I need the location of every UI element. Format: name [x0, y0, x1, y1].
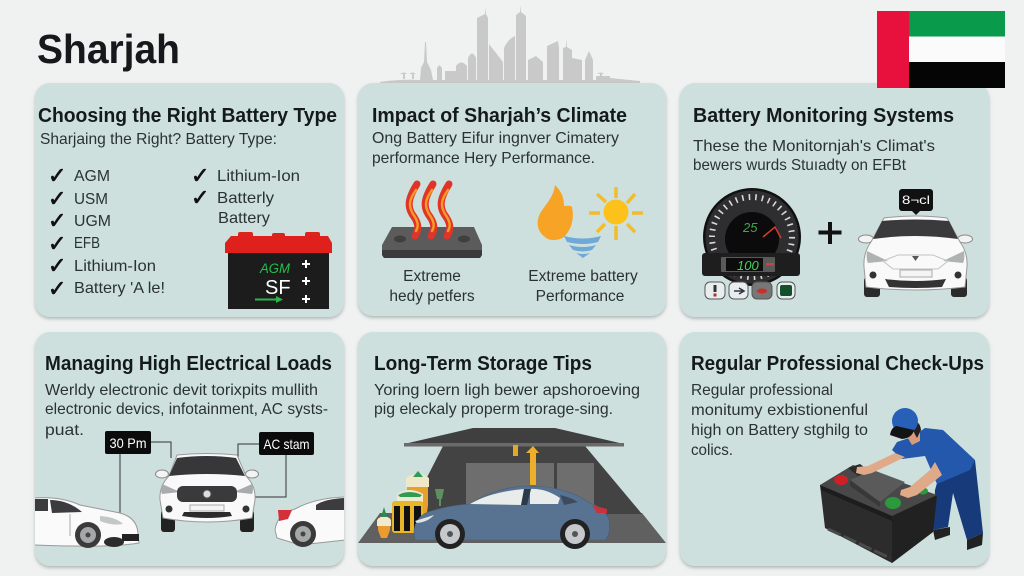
- checklist left: [48, 164, 165, 302]
- body text: These the Monitornjah's Climat's: [693, 138, 935, 155]
- checklist left: AGM: [74, 168, 110, 185]
- body text: monitumy exbistionenful: [691, 402, 868, 419]
- heading: Impact of Sharjah’s Climate: [372, 105, 627, 127]
- icon: AGM battery: SF: [265, 277, 291, 299]
- icon: dashboard gauge: 25: [742, 220, 758, 235]
- body text: [45, 382, 328, 439]
- UAE flag: [877, 11, 1005, 88]
- body text: [372, 130, 619, 167]
- panel: choosing the right battery type: [35, 83, 344, 317]
- body text: electronic devics, infotainment, AC systs-: [45, 401, 328, 418]
- body text: performance Hery Performance.: [372, 150, 595, 167]
- callout lines: [120, 442, 286, 514]
- icon: mechanic arms: [856, 453, 942, 498]
- skyline illustration: [380, 5, 640, 83]
- heading: Managing High Electrical Loads: [45, 353, 332, 375]
- checklist left: EFB: [74, 235, 100, 252]
- heading: Choosing the Right Battery Type: [38, 105, 337, 127]
- body text: [374, 382, 640, 418]
- checklist right: Battery: [218, 210, 270, 227]
- icon: AGM battery: [225, 232, 332, 309]
- icon: yellow arrow: [526, 446, 539, 485]
- title: Sharjah: [37, 26, 180, 72]
- panel: battery monitoring systems: [680, 83, 989, 317]
- checklist left: ✓: [48, 187, 66, 212]
- heading: Battery Monitoring Systems: [693, 105, 954, 127]
- body text: colics.: [691, 442, 733, 459]
- icon: speech bubble label: 8¬cl: [902, 193, 930, 207]
- checklist left: ✓: [48, 254, 66, 279]
- checklist right: Lithium-Ion: [217, 168, 300, 185]
- panel: long-term storage tips: [358, 332, 666, 566]
- icon: plus: [818, 222, 842, 244]
- body text: Werldy electronic devit torixpits mullith: [45, 382, 318, 399]
- caption: left: [389, 268, 475, 305]
- caption: left: Extreme: [403, 268, 461, 285]
- icon: flame, water and sun: [538, 185, 643, 258]
- icon: car battery: [820, 464, 937, 563]
- checklist right: ✓: [191, 186, 209, 211]
- heading: Regular Professional Check-Ups: [691, 353, 984, 375]
- panel: regular professional check-ups: [680, 332, 989, 566]
- storage containers: [377, 471, 444, 538]
- body text: bewers wurds Stuıadty on EFBt: [693, 157, 907, 174]
- icon: white car left: [34, 498, 139, 548]
- icon: white car right: [275, 497, 345, 547]
- icon: dashboard gauge: [702, 188, 801, 299]
- checklist right: Batterly: [217, 190, 274, 207]
- icon: white car front: [858, 216, 972, 297]
- caption: right: [528, 268, 638, 305]
- checklist left: Battery 'A le!: [74, 280, 165, 297]
- body text: Regular professional: [691, 382, 833, 399]
- icon: AGM battery: AGM: [259, 261, 291, 276]
- subtitle: Sharjaing the Right? Battery Type:: [40, 131, 277, 148]
- callout: AC stam: [259, 432, 314, 455]
- heading: Long-Term Storage Tips: [374, 353, 592, 375]
- checklist left: ✓: [48, 232, 66, 257]
- icon: blue sedan: [414, 486, 610, 549]
- icon: speech bubble label: [899, 189, 933, 215]
- checklist left: Lithium-Ion: [74, 258, 156, 275]
- panel: impact of climate: [358, 83, 666, 316]
- callout: AC stam: AC stam: [264, 436, 310, 452]
- checklist left: USM: [74, 191, 108, 208]
- caption: left: hedy petfers: [389, 288, 475, 305]
- icon: mechanic body: [890, 408, 983, 550]
- caption: right: Performance: [536, 288, 624, 305]
- panel: managing high electrical loads: [34, 332, 345, 566]
- body text: pig eleckaly properm trorage-sing.: [374, 401, 613, 418]
- icon: dashboard gauge: 100: [737, 258, 759, 273]
- icon: white car front: [156, 454, 258, 532]
- checklist left: UGM: [74, 213, 111, 230]
- checklist right: ✓: [191, 164, 209, 189]
- checklist right: [191, 164, 300, 227]
- body text: Ong Battery Eifur ingnver Cimatery: [372, 130, 619, 147]
- checklist left: ✓: [48, 277, 66, 302]
- body text: Yoring loern ligh bewer apshoroeving: [374, 382, 640, 399]
- garage illustration: [358, 428, 666, 543]
- body text: high on Battery stghilg to: [691, 422, 868, 439]
- body text: [691, 382, 868, 459]
- checklist left: ✓: [48, 164, 66, 189]
- callout: 30 Pm: 30 Pm: [110, 435, 146, 451]
- body text: puat.: [45, 422, 84, 439]
- caption: right: Extreme battery: [528, 268, 638, 285]
- icon: hot battery: [382, 184, 482, 258]
- callout: 30 Pm: [105, 431, 151, 454]
- body text: [693, 138, 935, 174]
- checklist left: ✓: [48, 209, 66, 234]
